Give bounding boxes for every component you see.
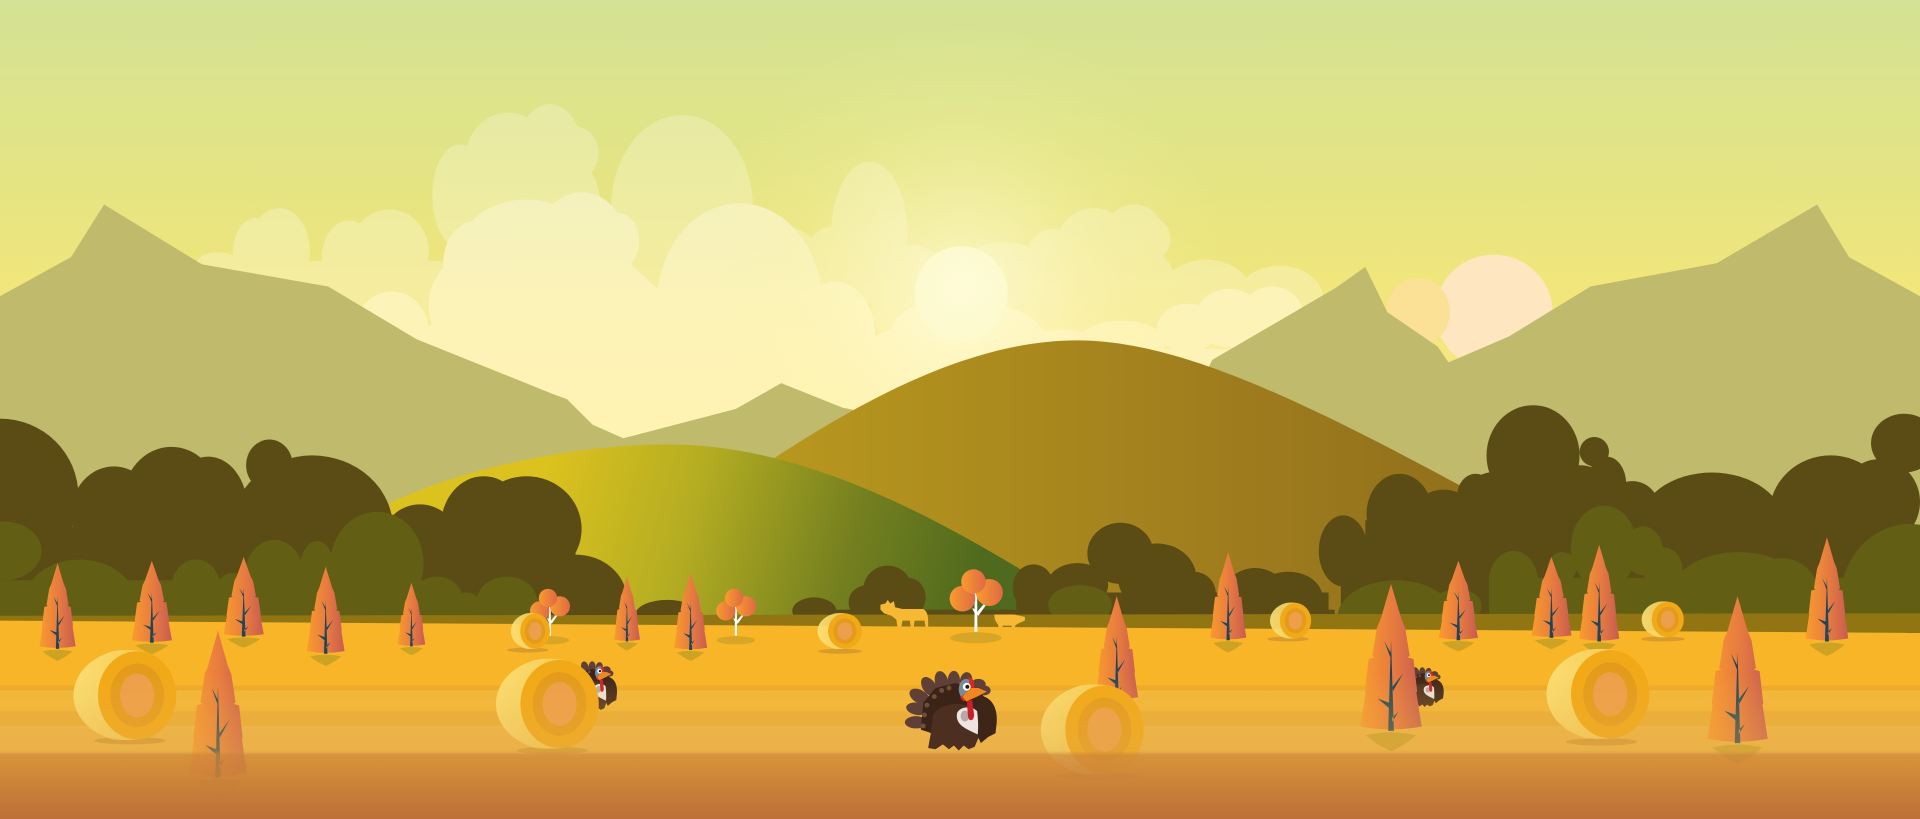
bushes: olive front row centre bbox=[1048, 585, 1112, 624]
mountains: right range bbox=[1102, 204, 1920, 588]
turkey: large foreground bbox=[905, 670, 997, 750]
bushes: dark tree line centre bbox=[792, 523, 1335, 624]
mountains: left range bbox=[0, 204, 931, 588]
back row trees bbox=[39, 537, 1848, 715]
turkey: small, behind tree bbox=[1398, 667, 1444, 707]
small round tree: middle bbox=[716, 589, 756, 644]
ochre horizon strip bbox=[0, 613, 1920, 637]
small round tree: right bbox=[950, 569, 1003, 643]
large hay bales bbox=[73, 649, 1649, 780]
ground fog bbox=[0, 673, 1920, 819]
field bands bbox=[0, 686, 1920, 758]
sky background bbox=[0, 0, 1920, 490]
bushes: olive front row left bbox=[0, 512, 539, 653]
far clouds behind right peak bbox=[1386, 255, 1553, 370]
pig silhouette bbox=[994, 615, 1025, 629]
field bbox=[0, 621, 1920, 819]
small round tree: left bbox=[530, 589, 570, 644]
near cloud layer bbox=[355, 192, 1303, 453]
turkey: small, peeking behind bale bbox=[564, 660, 617, 711]
sun glow bbox=[588, 0, 1347, 588]
sun bbox=[915, 246, 1008, 342]
foreground tree: centre right bbox=[1360, 584, 1422, 751]
green hill bbox=[389, 444, 1022, 624]
cow silhouette bbox=[880, 600, 928, 628]
bushes: dark tree line right bbox=[1319, 405, 1920, 622]
small hay bales bbox=[507, 601, 1685, 654]
brown hill bbox=[769, 340, 1463, 624]
foreground tree: left bbox=[189, 630, 247, 798]
far cloud layer bbox=[197, 104, 1324, 371]
foreground tree: right bbox=[1707, 596, 1768, 764]
bushes: olive front row right bbox=[1337, 506, 1920, 676]
bushes: dark tree line left bbox=[0, 419, 699, 645]
